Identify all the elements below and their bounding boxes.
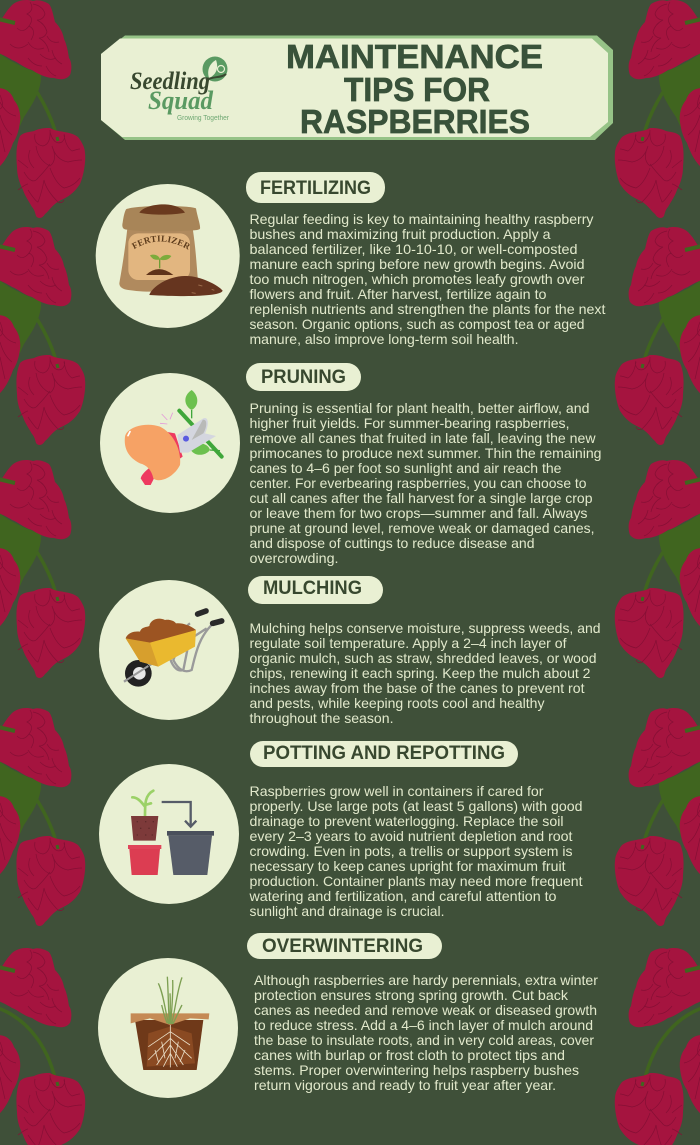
text: potting: watering and fertilization, and careful attention to [248, 889, 556, 904]
text: pruning: cut all canes after the fall harvest for a single large crop [250, 491, 592, 506]
icon: pot with roots [98, 958, 238, 1098]
text: mulching: and pests, while keeping roots cool and healthy [250, 696, 545, 711]
text: pruning: prune at ground level, remove weak or damaged canes, [250, 521, 594, 536]
text: pruning: primocanes to produce next summer. Thin the remaining [250, 446, 602, 461]
text: pruning [250, 401, 602, 566]
text: mulching: Mulching helps conserve moisture, suppress weeds, and [250, 621, 600, 636]
text: fertilizing: manure, also improve long-term soil health. [250, 332, 518, 347]
heading: mulching: MULCHING [263, 578, 362, 599]
icon: repotting [99, 764, 239, 904]
text: fertilizing: flowers and fruit. After harvest, fertilize again to [250, 287, 546, 302]
text: overwintering [254, 973, 598, 1093]
logo: Squad [148, 86, 214, 115]
text: potting: Raspberries grow well in containers if cared for [250, 784, 544, 799]
text: pruning: Pruning is essential for plant health, better airflow, and [250, 401, 590, 416]
icon: fertilizer bag: FERTILIZER [131, 236, 190, 250]
text: fertilizing: too much nitrogen, which promotes leafy growth over [250, 272, 585, 287]
text: pruning: center. For everbearing raspberries, you can choose to [250, 476, 586, 491]
heading: fertilizing: FERTILIZING [260, 178, 371, 199]
text: pruning: remove all canes that fruited in late fall, leaving the new [250, 431, 596, 446]
text: overwintering: the base to insulate roots, and in very cold areas, cover [254, 1033, 594, 1048]
text: mulching: inches away from the base of the canes to prevent rot [250, 681, 585, 696]
text: pruning: higher fruit yields. For summer-bearing raspberries, [250, 416, 570, 431]
icon: pruning shears [100, 373, 240, 513]
text: mulching [250, 621, 600, 726]
text: pruning: overcrowding. [250, 551, 338, 566]
text: fertilizing: bushes and maximizing fruit production. Apply a [250, 227, 551, 242]
logo [130, 56, 230, 122]
logo: Seedling [130, 68, 210, 95]
heading: fertilizing [246, 172, 385, 203]
text: potting: crowding. Even in pots, a trellis or support system is [250, 844, 573, 859]
text: fertilizing: balanced fertilizer, like 10-10-10, or well-composted [250, 242, 578, 257]
text: potting: every 2–3 years to avoid nutrient depletion and root [250, 829, 573, 844]
text: mulching: organic mulch, such as straw, shredded leaves, or wood [250, 651, 596, 666]
title: RASPBERRIES [300, 103, 530, 140]
left raspberry border [0, 0, 85, 1145]
logo: Growing Together [177, 115, 230, 122]
heading: pruning [246, 363, 361, 391]
heading: overwintering [247, 933, 442, 959]
text: potting: sunlight and drainage is crucial. [250, 904, 444, 919]
text: overwintering: protection ensures strong spring growth. Cut back [254, 988, 568, 1003]
text: mulching: chips, renewing it each spring. Keep the mulch about 2 [250, 666, 590, 681]
text: potting: production. Container plants may need more frequent [250, 874, 583, 889]
text: fertilizing [250, 212, 606, 347]
heading: potting and repotting: POTTING AND REPOTTING [263, 743, 505, 764]
heading: pruning: PRUNING [261, 367, 346, 388]
icon: fertilizer bag [96, 184, 240, 328]
text: potting: drainage to prevent waterlogging. Replace the soil [250, 814, 564, 829]
heading: mulching [248, 576, 383, 604]
title [286, 38, 543, 140]
text: fertilizing: season. Organic options, such as compost tea or aged [250, 317, 584, 332]
text: overwintering: stems. Proper overwintering helps raspberry bushes [254, 1063, 579, 1078]
text: overwintering: return vigorous and ready to fruit year after year. [254, 1078, 556, 1093]
text: mulching: throughout the season. [250, 711, 394, 726]
text: overwintering: canes as needed and remove weak or diseased growth [254, 1003, 597, 1018]
text: fertilizing: replenish nutrients and strengthen the plants for the next [250, 302, 606, 317]
title: TIPS FOR [344, 71, 490, 108]
text: pruning: canes to 4–6 per foot so sunlight and air reach the [250, 461, 562, 476]
text: overwintering: Although raspberries are hardy perennials, extra winter [254, 973, 598, 988]
text: pruning: and dispose of cuttings to reduce disease and [250, 536, 534, 551]
text: potting [248, 784, 583, 919]
text: overwintering: canes with burlap or frost cloth to protect tips and [254, 1048, 565, 1063]
text: fertilizing: Regular feeding is key to maintaining healthy raspberry [250, 212, 594, 227]
heading: overwintering: OVERWINTERING [262, 936, 423, 957]
text: pruning: or leave them for two crops—summer and fall. Always [250, 506, 588, 521]
text: potting: properly. Use large pots (at least 5 gallons) with good [250, 799, 582, 814]
text: mulching: regulate soil temperature. Apply a 2–4 inch layer of [250, 636, 567, 651]
text: potting: necessary to keep canes upright for maximum fruit [250, 859, 566, 874]
right raspberry border [615, 0, 700, 1145]
title banner [101, 36, 613, 140]
text: fertilizing: manure each spring before new growth begins. Avoid [250, 257, 584, 272]
title: MAINTENANCE [286, 38, 543, 75]
icon: wheelbarrow [99, 580, 239, 720]
text: overwintering: to reduce stress. Add a 4–6 inch layer of mulch around [254, 1018, 593, 1033]
